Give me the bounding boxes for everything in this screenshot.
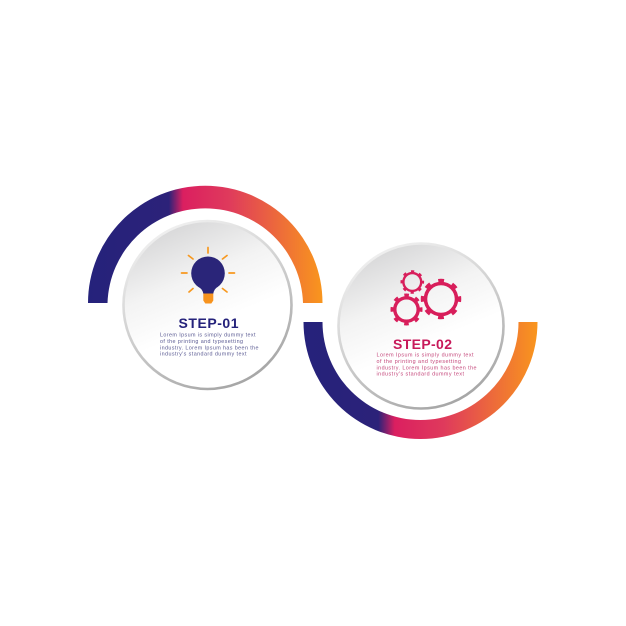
text block: step 1 description: industry's standard dummy text: [160, 352, 247, 358]
text block: step 1 description: of the printing and typesetting: [160, 339, 243, 345]
icon: gears: [392, 271, 460, 324]
text block: step 2 description: industry. Lorem Ipsum has been the: [376, 365, 476, 371]
text block: step 1 description: Lorem Ipsum is simply dummy text: [160, 332, 256, 338]
gear: large: [422, 280, 460, 318]
text block: step 2 description: industry's standard dummy text: [376, 371, 464, 377]
arc: step 1 top gradient band: [88, 186, 322, 303]
icon: light bulb: [182, 248, 234, 304]
text block: step 1 description: industry. Lorem Ipsum has been the: [160, 345, 258, 351]
text block: step 2 description: of the printing and typesetting: [376, 359, 461, 365]
gear: top: [402, 271, 423, 293]
gear: lower left: [392, 295, 421, 324]
text block: step 2 description: Lorem Ipsum is simply dummy text: [376, 352, 474, 358]
arc: step 2 bottom gradient band: [304, 322, 538, 439]
panel: step 1 circle: [124, 221, 292, 389]
panel: step 2 circle: [338, 244, 504, 408]
heading: STEP-02: STEP-02: [393, 336, 452, 352]
heading: STEP-01: STEP-01: [178, 315, 239, 331]
